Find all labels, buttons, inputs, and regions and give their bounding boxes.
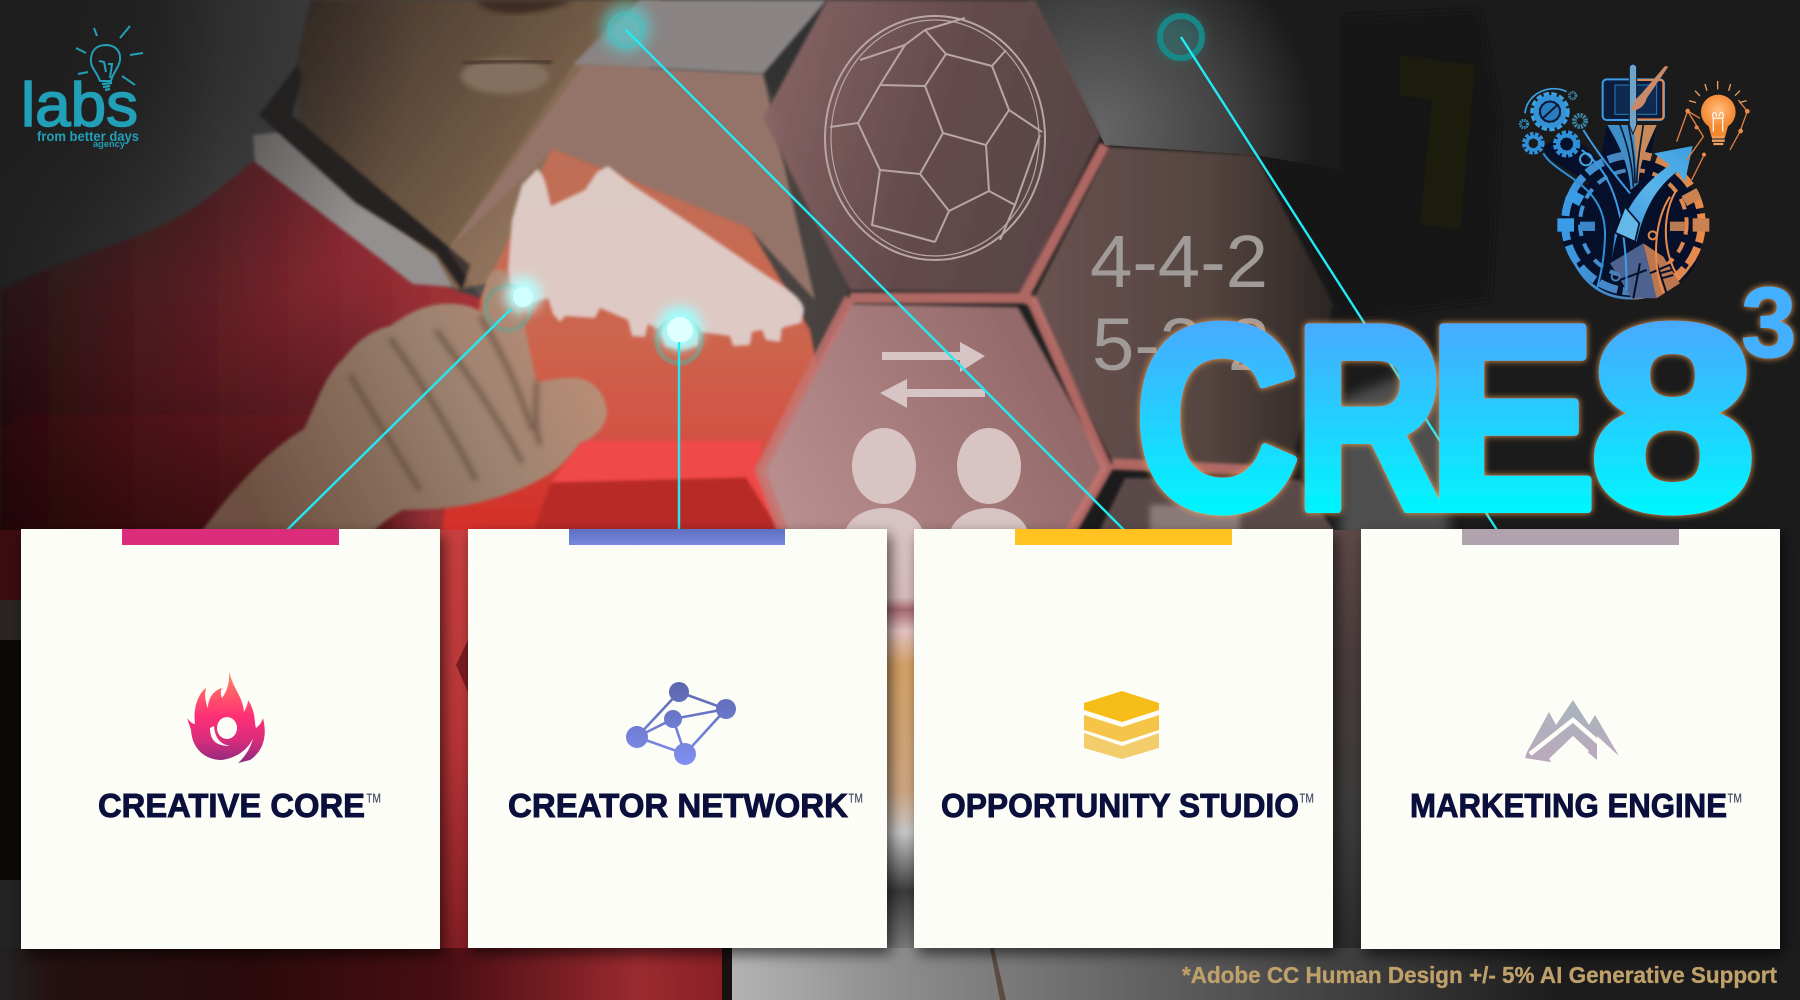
accent tab (1462, 529, 1679, 545)
white collar (253, 132, 453, 287)
gray hexagon top centre (1030, 0, 1340, 170)
CRE8 emblem (1520, 64, 1750, 300)
strips around cards (0, 530, 1800, 1000)
connector lines to cards (287, 30, 1497, 530)
arrow shard (1615, 207, 1639, 242)
hexagon borders (760, 145, 1290, 540)
shirt right (440, 148, 852, 540)
accent tab (122, 529, 339, 545)
beam highlights (1620, 125, 1643, 187)
nose shadow (476, 0, 574, 14)
shirt shading (0, 280, 400, 570)
shirt left (0, 160, 560, 540)
touch point: boot stud (657, 306, 702, 363)
upper wall tone (0, 0, 1100, 540)
background photo: player and hexagon overlays (0, 0, 1500, 570)
lips (461, 58, 549, 94)
soccer ball outline (825, 16, 1045, 260)
labs logo (21, 26, 143, 149)
top gray hexagon (574, 0, 827, 74)
card title: OPPORTUNITY STUDIO (941, 787, 1299, 824)
formation numbers: 4-4-2 (1090, 220, 1268, 303)
hexagon lower right (1095, 478, 1340, 540)
mandala arcs (1565, 155, 1702, 298)
player silhouettes (844, 428, 1029, 568)
football boot silhouette (508, 166, 804, 350)
bulb rays (1689, 81, 1747, 103)
network around bulb (1677, 100, 1747, 180)
lower panels (1610, 243, 1657, 298)
stylus (1629, 64, 1637, 134)
emblem backing (1543, 125, 1702, 300)
paint brush (1631, 66, 1668, 111)
flow strands (1543, 130, 1680, 293)
title: CRE8 cubed: 8 (1589, 270, 1756, 565)
card title: CREATIVE CORE (98, 787, 365, 824)
tablet (1603, 79, 1664, 120)
player neck and face (295, 0, 815, 300)
title: CRE8 cubed: C (1134, 271, 1300, 566)
hexagon: exchange and players (758, 304, 1107, 568)
gray patch behind R (1340, 360, 1450, 540)
icon: flame (187, 670, 265, 763)
accent tab (1015, 529, 1232, 545)
panel: Marketing Engine (1361, 529, 1780, 949)
lightbulb icon (76, 26, 143, 90)
arrow swoop (1612, 146, 1693, 262)
dark fade top left (0, 0, 430, 430)
title: CRE8 cubed: E (1426, 271, 1598, 566)
trademark: ™ (847, 789, 864, 816)
touch point: top right (1157, 13, 1205, 61)
touch points (486, 3, 1205, 363)
network nodes (1685, 109, 1750, 157)
black collar trim (259, 64, 470, 290)
trademark: ™ (365, 789, 382, 816)
icon: stacked layers (1084, 691, 1159, 759)
icon: network (626, 682, 736, 765)
lighter overlay right of diagonal (448, 0, 815, 300)
title: CRE8 cubed: R (1294, 272, 1445, 566)
icon: mountain chevrons (1525, 700, 1619, 762)
trademark: ™ (1726, 789, 1743, 816)
mandala blocks (1557, 189, 1709, 232)
exchange arrows (880, 342, 985, 408)
lower red hexagon (530, 478, 786, 540)
panel: Opportunity Studio (914, 529, 1333, 948)
finger creases (350, 316, 540, 490)
lightbulb (1701, 95, 1736, 129)
card title: CREATOR NETWORK (508, 787, 848, 824)
faint dark hexagon at right (1270, 10, 1500, 320)
labs wordmark: labs (21, 71, 138, 140)
card title: MARKETING ENGINE (1410, 787, 1727, 824)
hand (195, 270, 607, 540)
trademark: ™ (1298, 789, 1315, 816)
panel grid lines (1620, 263, 1673, 298)
gears (1520, 89, 1586, 154)
footnote: *Adobe CC Human Design +/- 5% AI Generative Support (1182, 962, 1777, 988)
centre dark (1600, 177, 1667, 277)
central beam from tablet (1607, 125, 1657, 190)
agency: agency (93, 139, 125, 149)
touch point: finger (486, 277, 541, 330)
lower red hexagon band (551, 441, 786, 540)
superscript 3: 3 (1741, 267, 1797, 379)
hexagon: formations: 5-3-2 (1092, 303, 1270, 386)
faint cup shape (1150, 505, 1240, 535)
touch point: top centre (601, 3, 651, 53)
title: CRE8 cubed (1134, 267, 1797, 566)
hexagon: soccer ball (763, 0, 1101, 292)
panel: Creative Core (21, 529, 440, 949)
faint olive seven (1400, 55, 1475, 230)
accent tab (569, 529, 785, 545)
hexagon: formations (1032, 147, 1333, 470)
skin tinted hexagon (448, 64, 850, 470)
panel: Creator Network (468, 529, 887, 948)
mouth line (462, 61, 552, 64)
from better days: from better days (37, 129, 139, 144)
